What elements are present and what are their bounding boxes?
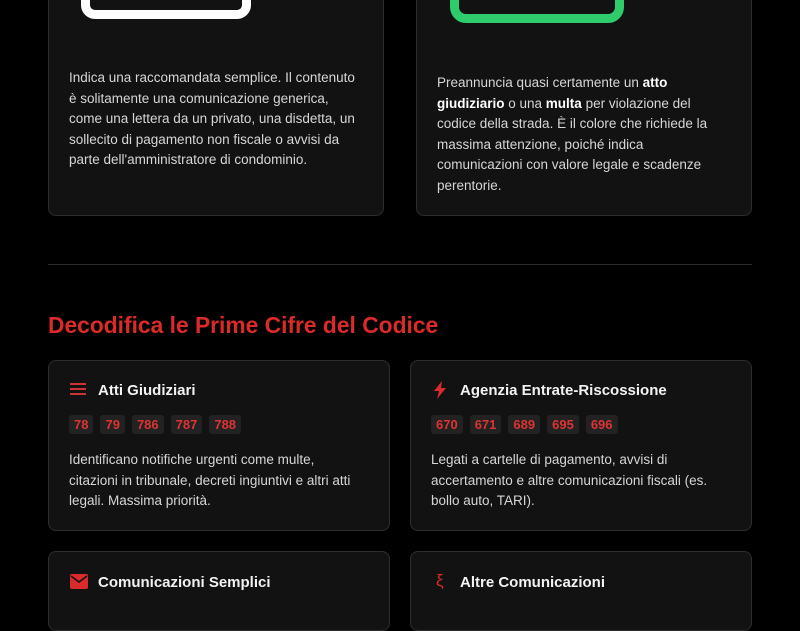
text: Identificano notifiche urgenti come multe, citazioni in tribunale, decreti ingiuntivi e altri atti legali. Massima priorità. bbox=[69, 452, 350, 508]
text: Legati a cartelle di pagamento, avvisi di accertamento e altre comunicazioni fiscali (es. bollo auto, TARI). bbox=[431, 452, 707, 508]
chips: 689 bbox=[513, 417, 535, 432]
text: white description: Indica una raccomandata semplice. Il contenuto è solitamente una comunicazione generica, come una lettera da un privato, una disdetta, un sollecito di pagamento non fiscale o avvisi da parte dell'amministratore di condominio. bbox=[69, 70, 355, 167]
panel: altre comunicazioni: Altre Comunicazioni bbox=[460, 574, 605, 591]
panel: agenzia entrate: Agenzia Entrate-Riscossione bbox=[460, 382, 667, 399]
panel: comunicazioni semplici bbox=[48, 551, 390, 631]
panel: atti giudiziari bbox=[48, 360, 390, 531]
panel: agenzia entrate bbox=[410, 360, 752, 531]
chips: 696 bbox=[591, 417, 613, 432]
chips: 695 bbox=[552, 417, 574, 432]
chips: 671 bbox=[475, 417, 496, 432]
icon: green envelope outline bbox=[450, 0, 624, 23]
chips bbox=[69, 415, 241, 434]
panel: atti giudiziari: Atti Giudiziari bbox=[98, 382, 196, 399]
chips: 786 bbox=[137, 417, 159, 432]
panel: comunicazioni semplici: Comunicazioni Semplici bbox=[98, 574, 271, 591]
icon: envelope bbox=[70, 574, 88, 589]
panel: altre comunicazioni bbox=[410, 551, 752, 631]
chips: 670 bbox=[436, 417, 458, 432]
text: green description: Preannuncia quasi certamente un atto giudiziario o una multa per violazione del codice della strada. È il colore che richiede la massima attenzione, poiché indica comunicazioni con valore legale e scadenze perentorie. bbox=[437, 75, 707, 192]
chips: 787 bbox=[176, 417, 197, 432]
chips: 788 bbox=[214, 417, 236, 432]
icon: squiggle: ξ bbox=[436, 571, 444, 590]
chips bbox=[431, 415, 618, 434]
icon: lines bbox=[70, 383, 86, 395]
card: white raccomandata bbox=[48, 0, 384, 216]
card: green raccomandata bbox=[416, 0, 752, 216]
chips: 78 bbox=[74, 417, 88, 432]
icon: white envelope outline bbox=[81, 0, 251, 19]
icon: bolt bbox=[434, 381, 446, 399]
chips: 79 bbox=[105, 417, 120, 432]
heading: Decodifica le Prime Cifre del Codice bbox=[48, 312, 438, 338]
